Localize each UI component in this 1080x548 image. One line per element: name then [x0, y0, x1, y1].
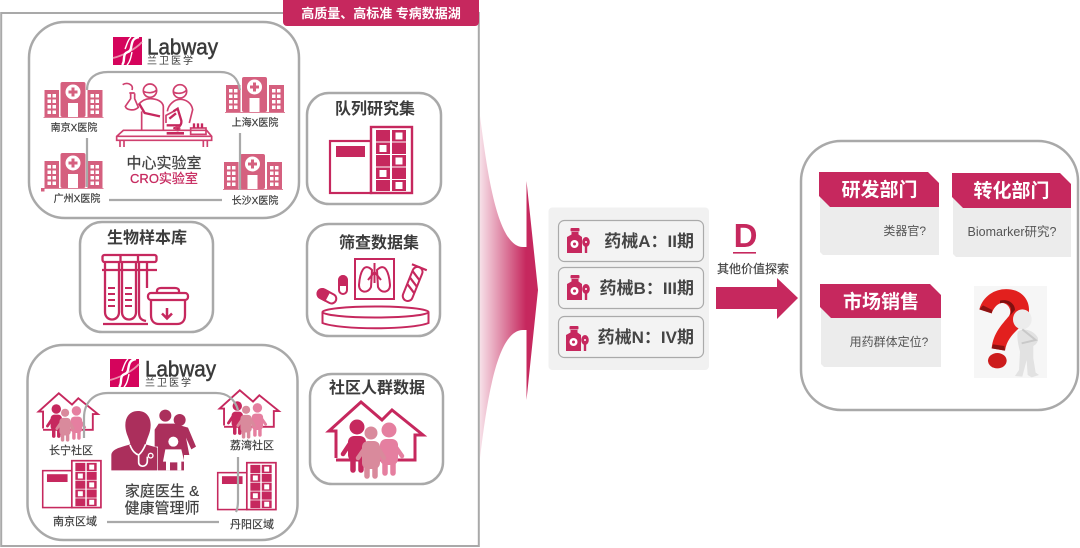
icon: community house Liwan: 荔湾社区: [230, 438, 274, 452]
panel: cohort study set: 队列研究集: [335, 99, 415, 118]
card: marketing sales: [820, 284, 941, 367]
panel: community population data: [310, 374, 443, 484]
icon: community house Changning: [39, 393, 98, 457]
text: family doctor: [124, 483, 200, 517]
panel: community network: [28, 345, 298, 540]
card: R&D department: 类器官?: [883, 223, 926, 238]
text: family doctor: 家庭医生 &: [125, 483, 199, 500]
icon: data building Nanjing: 南京区域: [53, 514, 97, 528]
text: family doctor: 健康管理师: [124, 500, 200, 517]
icon: doctor and family: [111, 410, 196, 470]
item: drug A: 药械A：II期: [604, 232, 694, 251]
logo: Labway: Labway: [147, 34, 218, 60]
panel: biobank: [80, 222, 213, 332]
icon: hospital Nanjing: [44, 82, 104, 134]
item: drug B: 药械B：III期: [600, 279, 694, 298]
item: drug N: [558, 316, 704, 358]
icon: test tubes and box: [102, 255, 188, 324]
card: R&D department: 研发部门: [841, 178, 918, 201]
panel: departments: [801, 141, 1078, 410]
heading tab: data lake: 高质量、高标准 专病数据湖: [301, 6, 461, 21]
card: translational department: [952, 173, 1071, 257]
panel: data lake outer frame: [1, 13, 479, 546]
connector lines: [84, 393, 238, 522]
icon: data building: [330, 127, 412, 193]
item: drug B: [558, 268, 704, 308]
panel: biobank: 生物样本库: [107, 228, 187, 247]
heading tab: data lake: [283, 0, 479, 26]
letter D with underline: D: [734, 217, 757, 254]
icon: question mark with thinking figure: [974, 286, 1047, 378]
text: central lab: 中心实验室: [126, 155, 202, 172]
icon: data building Danyang: [218, 463, 276, 531]
panel: drug trial phases: [548, 208, 709, 370]
icon: scientists at lab bench: [117, 84, 212, 147]
logo: Labway: 兰卫医学: [147, 54, 193, 67]
logo: Labway: [113, 34, 218, 67]
connector lines: [87, 72, 240, 200]
logo: Labway: Labway: [145, 356, 216, 382]
icon: lungs, pills, tube and dish: [316, 259, 428, 328]
item: drug N: 药械N：IV期: [598, 328, 694, 347]
label: other value exploration: 其他价值探索: [717, 261, 789, 276]
icon: house with family: [329, 402, 423, 476]
card: R&D department: [819, 172, 939, 255]
icon: hospital Guangzhou: [41, 153, 104, 205]
icon: community house Changning: 长宁社区: [49, 443, 93, 457]
icon: community house Liwan: [220, 390, 279, 452]
icon: data building Nanjing: [43, 461, 101, 528]
text: central lab: CRO实验室: [130, 171, 198, 186]
icon: hospital Guangzhou: 广州X医院: [54, 192, 100, 205]
text: central lab: [126, 155, 202, 186]
icon: hospital Changsha: [223, 154, 283, 207]
icon: hospital Changsha: 长沙X医院: [232, 194, 278, 207]
logo: Labway: 兰卫医学: [145, 376, 191, 389]
icon: data building Danyang: 丹阳区域: [230, 518, 274, 531]
panel: community population data: 社区人群数据: [329, 378, 425, 397]
card: translational department: Biomarker研究?: [968, 224, 1056, 239]
funnel arrow: [480, 116, 538, 458]
panel: cohort study set: [307, 93, 441, 204]
icon: hospital Shanghai: [225, 77, 285, 129]
item: drug A: [558, 220, 704, 262]
icon: hospital Nanjing: 南京X医院: [51, 121, 97, 134]
icon: hospital Shanghai: 上海X医院: [232, 116, 278, 129]
panel: screening data set: [307, 224, 440, 336]
card: marketing sales: 用药群体定位?: [850, 334, 929, 349]
logo: Labway: [110, 356, 216, 389]
arrow to departments: [716, 278, 798, 319]
card: marketing sales: 市场销售: [843, 290, 919, 313]
panel: screening data set: 筛查数据集: [339, 233, 419, 252]
card: translational department: 转化部门: [973, 179, 1050, 202]
panel: central lab network: [29, 22, 299, 218]
